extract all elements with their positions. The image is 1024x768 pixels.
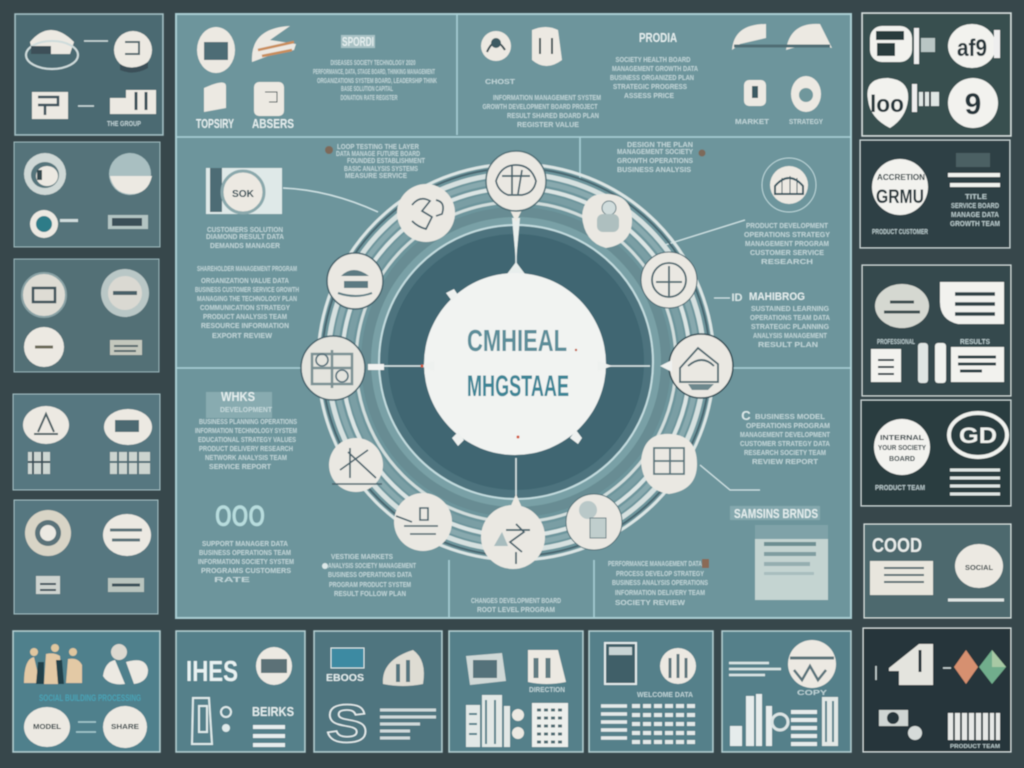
panel: right text blocks (617, 142, 831, 600)
panel: right text blocks: CUSTOMER STRATEGY DATA (740, 441, 830, 448)
panel: right text blocks: STRATEGIC PLANNING (751, 324, 830, 331)
text block: middle column two (610, 30, 698, 100)
text block: large rounded letters: PROGRAMS CUSTOMERS (201, 568, 291, 575)
chart: central ring (301, 151, 733, 569)
text block: top left (313, 34, 437, 102)
panel: bottom four (589, 631, 713, 752)
text block: middle column one: RESULT SHARED BOARD PLAN (507, 113, 599, 120)
text block: top center notes (325, 144, 426, 180)
panel: upper left sub-section (206, 144, 426, 250)
node: lower right (566, 494, 622, 550)
panel: right five (864, 524, 1011, 618)
panel: right two: MANAGE DATA (951, 212, 999, 219)
panel: right two: GROWTH TEAM (950, 221, 1000, 228)
text block: gauge caption: DEMANDS MANAGER (210, 243, 280, 250)
text block: top left: PERFORMANCE, DATA, STAGE BOARD, THINKING MANAGEMENT (313, 69, 435, 76)
text block: left lower: BUSINESS PLANNING OPERATIONS (199, 419, 297, 426)
panel: bottom one: BEIRKS (252, 704, 294, 719)
panel: right text blocks: PRODUCT DEVELOPMENT (746, 223, 829, 230)
panel: right four: YOUR SOCIETY (878, 445, 926, 452)
icon: framed gauge: SOK (232, 189, 255, 200)
text block: top left: BASE SOLUTION CAPITAL (341, 86, 393, 93)
panel: right four: BOARD (889, 456, 915, 463)
panel: bottom one (176, 631, 305, 752)
text block: top center notes: FOUNDED ESTABLISHMENT (347, 158, 426, 165)
node: right lower (641, 434, 697, 494)
text block: left middle: COMMUNICATION STRATEGY (200, 305, 290, 312)
panel: bottom two: S (326, 694, 368, 754)
panel: main diagram background (176, 14, 851, 618)
icon: framed gauge (206, 168, 282, 214)
text block: middle column two: STRATEGIC PROGRESS (613, 84, 687, 91)
panel: left four (13, 394, 160, 490)
text block: left lower: EDUCATIONAL STRATEGY VALUES (198, 437, 296, 444)
text block: left middle: ORGANIZATION VALUE DATA (201, 278, 289, 285)
icon: paired figures (481, 27, 562, 66)
panel: bottom two (314, 631, 442, 754)
heading: bottom right title: SAMSINS BRNDS (734, 506, 818, 521)
text block: top left: DONATION RATE REGISTER (340, 95, 398, 102)
text block: lower notes: ROOT LEVEL PROGRAM (477, 607, 555, 614)
panel: right four (861, 400, 1011, 506)
node: bottom (481, 494, 545, 569)
panel: right one: af9 (957, 35, 987, 62)
panel: right five: SOCIAL (965, 565, 994, 572)
text block: top center notes: BASIC ANALYSIS SYSTEMS (344, 166, 418, 173)
text block: left lower (195, 389, 297, 471)
panel: right text blocks: SUSTAINED LEARNING (751, 306, 830, 313)
text block: top center notes: MEASURE SERVICE (345, 173, 407, 180)
panel: right four: PRODUCT TEAM (875, 485, 925, 492)
text block: middle column two: ASSESS PRICE (624, 93, 674, 100)
icon: lower pair (744, 76, 821, 112)
panel: right text blocks: BUSINESS MODEL (755, 414, 826, 421)
text block: top left: DISEASES SOCIETY TECHNOLOGY 2020 (330, 60, 416, 67)
text block: middle column two: MANAGEMENT GROWTH DATA (612, 66, 698, 73)
text block: middle column two: PRODIA (639, 30, 677, 45)
node: upper left (397, 184, 455, 242)
text block: lower notes: CHANGES DEVELOPMENT BOARD (471, 598, 561, 605)
text block: lower notes: RESULT FOLLOW PLAN (334, 591, 406, 598)
panel: right three: PROFESSIONAL (877, 339, 915, 346)
text block: middle column two: SOCIETY HEALTH BOARD (616, 57, 690, 64)
title (467, 323, 569, 403)
panel: right text blocks: C (741, 408, 751, 423)
panel: right two (860, 140, 1010, 248)
text block: large rounded letters: OOO (215, 500, 265, 533)
panel: right two: ACCRETION (877, 173, 925, 182)
icon: tablet (254, 82, 284, 116)
panel: top middle section (481, 24, 832, 129)
text block: middle column one: CHOST (485, 79, 516, 86)
panel: right text blocks: GROWTH OPERATIONS (617, 158, 693, 165)
text block: lower notes: VESTIGE MARKETS (331, 554, 393, 561)
captions: top left icons: ABSERS (252, 116, 294, 131)
text block: middle column one (482, 79, 601, 129)
panel: right text blocks: MAHIBROG (749, 291, 805, 303)
node: lower left (394, 493, 452, 551)
text block: left lower: INFORMATION TECHNOLOGY SYSTEM (195, 428, 297, 435)
panel: bottom one: IHES (186, 656, 238, 688)
panel: left three (14, 259, 159, 372)
icon: right circle gauge (762, 158, 816, 212)
panel: right text blocks: ANALYSIS MANAGEMENT (753, 333, 828, 340)
panel: right four: INTERNAL (880, 435, 925, 442)
panel: right five: COOD (872, 535, 922, 557)
title: CMHIEAL (467, 323, 567, 358)
panel: top left section (196, 26, 437, 131)
text block: left lower: DEVELOPMENT (220, 407, 273, 414)
text block: large rounded letters: RATE (214, 577, 251, 584)
text block: left middle: EXPORT REVIEW (212, 333, 272, 340)
text block: large rounded letters: SUPPORT MANAGER DATA (202, 541, 288, 548)
captions: top middle icons (735, 119, 823, 126)
panel: right six (863, 628, 1011, 752)
icon: helmet (252, 26, 296, 62)
panel: bottom two: EBOOS (326, 673, 364, 684)
panel: left one: THE GROUP (107, 121, 141, 128)
panel: right text blocks: MANAGEMENT SOCIETY (617, 149, 693, 156)
text block: top center notes: DATA MANAGE FUTURE BOARD (336, 151, 420, 158)
panel: right text blocks: DESIGN THE PLAN (627, 142, 693, 149)
panel: right text blocks: MANAGEMENT DEVELOPMENT (740, 432, 831, 439)
node: right (660, 334, 733, 398)
text block: middle column one: REGISTER VALUE (517, 122, 579, 129)
panel: right four: GD (959, 423, 997, 448)
text block: left middle: RESOURCE INFORMATION (201, 323, 289, 330)
text block: lower notes: INFORMATION DELIVERY TEAM (615, 590, 705, 597)
text block: lower notes: BUSINESS ANALYSIS OPERATIONS (612, 580, 708, 587)
panel: right text blocks: REVIEW REPORT (752, 459, 819, 466)
text block: lower notes (322, 554, 709, 614)
text block: left lower: NETWORK ANALYSIS TEAM (205, 455, 287, 462)
captions: top middle icons: STRATEGY (789, 119, 823, 126)
panel: right text blocks: OPERATIONS TEAM DATA (750, 315, 830, 322)
panel: right text blocks: ID (732, 292, 743, 304)
text block: large rounded letters: BUSINESS OPERATIONS TEAM (199, 550, 291, 557)
text block: middle column one: GROWTH DEVELOPMENT BOARD PROJECT (482, 104, 598, 111)
panel: bottom three (449, 631, 583, 752)
panel: right two: GRMU (876, 187, 924, 208)
text block: left lower: PRODUCT DELIVERY RESEARCH (199, 446, 293, 453)
captions: top left icons (196, 116, 294, 131)
panel: right six: PRODUCT TEAM (950, 744, 1000, 750)
text block: gauge caption: CUSTOMERS SOLUTION (207, 227, 283, 234)
text block: lower notes: PROCESS DEVELOP STRATEGY (616, 571, 704, 578)
panel: right two: TITLE (965, 194, 987, 201)
panel: right one (862, 13, 1011, 136)
panel: left six, people: MODEL (33, 724, 62, 731)
panel: right text blocks: MANAGEMENT PROGRAM (745, 241, 829, 248)
text block: middle column one: INFORMATION MANAGEMENT SYSTEM (493, 95, 601, 102)
text block: large rounded letters: INFORMATION SOCIETY SYSTEM (198, 559, 294, 566)
panel: right text blocks: BUSINESS ANALYSIS (617, 167, 691, 174)
text block: top left: ORGANIZATIONS SYSTEM BOARD, LEADERSHIP THINK (317, 78, 437, 85)
panel: left six, people (13, 631, 160, 752)
panel: right one: loo (870, 91, 904, 118)
text block: lower notes: BUSINESS OPERATIONS DATA (328, 572, 412, 579)
text block: left lower: SERVICE REPORT (209, 464, 272, 471)
text block: left middle (195, 266, 299, 340)
node: left (301, 336, 384, 400)
text block: top left: SPORDI (342, 34, 374, 49)
icon: square glyph (204, 82, 226, 112)
panel: left one (15, 14, 163, 135)
text block: top center notes: LOOP TESTING THE LAYER (337, 144, 419, 151)
text block: lower notes: PERFORMANCE MANAGEMENT DATA (608, 561, 702, 568)
text block: left lower: WHKS (221, 389, 255, 404)
text block: middle column two: BUSINESS ORGANIZED PLAN (610, 75, 694, 82)
panel: left six, people: SHARE (111, 724, 139, 731)
panel: left six, people: SOCIAL BUILDING PROCESSING (39, 693, 141, 703)
panel: right text blocks: RESULT PLAN (758, 342, 818, 349)
panel: right text blocks: RESEARCH SOCIETY TEAM (744, 450, 826, 457)
panel: right two: PRODUCT CUSTOMER (872, 229, 928, 236)
panel: right text blocks: OPERATIONS STRATEGY (744, 232, 830, 239)
panel: left five (14, 500, 158, 614)
text block: gauge caption: DIAMOND RESULT DATA (206, 234, 284, 241)
text block: lower notes: ANALYSIS SOCIETY MANAGEMENT (328, 563, 417, 570)
card: bottom right (755, 525, 828, 600)
captions: top middle icons: MARKET (735, 119, 770, 126)
panel: right one: 9 (965, 88, 981, 121)
text block: large rounded letters (198, 500, 294, 584)
center disc (420, 273, 612, 455)
node: left upper (327, 253, 383, 309)
text block: left middle: SHAREHOLDER MANAGEMENT PROGRAM (197, 266, 297, 273)
node: top (486, 151, 546, 222)
captions: top left icons: TOPSIRY (196, 116, 234, 131)
panel: right text blocks: OPERATIONS PROGRAM (746, 423, 830, 430)
text block: left middle: MANAGING THE TECHNOLOGY PLAN (197, 296, 297, 303)
text block: lower notes: SOCIETY REVIEW (615, 600, 685, 607)
panel: right two: SERVICE BOARD (951, 203, 999, 210)
node: upper right (582, 194, 632, 248)
text block: gauge caption (206, 227, 284, 250)
icon: white caps (732, 24, 832, 50)
connector: gauge to ring (283, 188, 378, 212)
panel: bottom five (722, 631, 851, 752)
panel: bottom five: COPY (797, 690, 827, 697)
panel: right text blocks: RESEARCH (761, 259, 813, 266)
panel: right three (862, 265, 1011, 396)
title: MHGSTAAE (467, 370, 569, 403)
panel: bottom three: DIRECTION (529, 687, 565, 694)
node: right upper (641, 252, 697, 308)
panel: right three: RESULTS (960, 339, 990, 346)
text block: left middle: BUSINESS CUSTOMER SERVICE GROWTH (195, 287, 299, 294)
text block: lower notes: PROGRAM PRODUCT SYSTEM (329, 582, 411, 589)
panel: bottom four: WELCOME DATA (637, 692, 693, 699)
icon: monitor badge (197, 27, 235, 73)
panel: right text blocks: CUSTOMER SERVICE (750, 250, 824, 257)
panel: left two (14, 142, 160, 247)
text block: left middle: PRODUCT ANALYSIS TEAM (203, 314, 287, 321)
node: left lower (329, 438, 383, 492)
